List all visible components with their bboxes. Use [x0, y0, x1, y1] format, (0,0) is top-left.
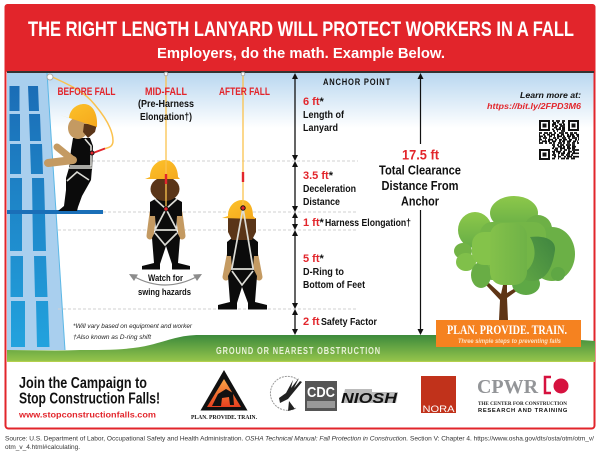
dimension labels: ANCHOR POINT — [323, 77, 391, 88]
swing hazards note: swing hazards — [138, 287, 191, 298]
total clearance label: Distance From — [382, 178, 458, 193]
head — [68, 117, 88, 139]
footnotes: *Will vary based on equipment and worker — [73, 324, 193, 330]
panel: sky gradient — [7, 73, 594, 128]
learn more link — [487, 91, 582, 111]
torso — [69, 138, 93, 170]
QR code — [539, 120, 579, 160]
harness — [155, 199, 177, 245]
dimension arrows — [292, 73, 298, 335]
d-ring — [90, 151, 94, 155]
ground label: GROUND OR NEAREST OBSTRUCTION — [216, 346, 381, 357]
arms — [226, 256, 259, 277]
dimension labels: Safety Factor — [321, 316, 377, 328]
total clearance label: 17.5 ft — [402, 148, 439, 162]
footnotes: †Also known as D-ring shift — [73, 335, 151, 341]
hair — [228, 218, 256, 240]
logo: plan provide train: PLAN. PROVIDE. TRAIN. — [191, 414, 257, 421]
harness — [231, 208, 254, 285]
source note: Source: U.S. Department of Labor, Occupational Safety and Health Administration. OSHA Technical Manual: Fall Protection in Construction. Section V: Chapter 4. https://www.osha.gov/dts/osta/otm/otm_v/ — [5, 436, 594, 442]
source note — [5, 436, 594, 451]
dimension labels: 3.5 ft* — [303, 170, 334, 182]
legs and torso — [218, 238, 267, 310]
orange slogan box: PLAN. PROVIDE. TRAIN. — [447, 323, 567, 337]
logo: CPWR: THE CENTER FOR CONSTRUCTION — [478, 402, 568, 407]
logo: CDC — [305, 381, 337, 411]
figure: after fall — [218, 72, 267, 310]
orange slogan box: Three simple steps to preventing falls — [458, 339, 562, 345]
campaign call to action: Join the Campaign to — [19, 375, 147, 392]
stage labels: MID-FALL — [145, 86, 187, 98]
total clearance label — [379, 148, 461, 208]
legs and torso — [142, 198, 190, 270]
campaign call to action: www.stopconstructionfalls.com — [18, 410, 156, 420]
stage labels: BEFORE FALL — [58, 86, 116, 98]
campaign call to action — [18, 375, 160, 420]
rope — [165, 74, 167, 209]
platform — [7, 210, 103, 214]
dimension labels: 2 ft — [303, 316, 320, 328]
helmet — [60, 104, 97, 127]
canopy — [454, 196, 575, 295]
logo: NORA: NORA — [422, 404, 454, 414]
dimension labels: Lanyard — [303, 122, 338, 134]
arms — [150, 213, 182, 236]
swing hazards note — [129, 273, 202, 298]
learn more link: https://bit.ly/2FPD3M6 — [487, 102, 582, 111]
swing hazards note: Watch for — [148, 273, 183, 284]
helmet — [145, 160, 180, 179]
total clearance label: Total Clearance — [379, 162, 461, 178]
figure: mid-fall — [142, 72, 190, 270]
panel: header banner — [4, 4, 596, 73]
arms — [48, 147, 73, 163]
logo: CPWR: RESEARCH AND TRAINING — [478, 408, 568, 414]
dimension labels: Distance — [303, 196, 340, 208]
dimension labels: 5 ft* — [303, 253, 324, 265]
source note: otm_v_4.html#calculating. — [5, 444, 80, 451]
logo: CPWR: CPWR — [477, 376, 539, 398]
lanyard — [50, 76, 113, 149]
building — [7, 73, 65, 350]
stage labels: Elongation†) — [140, 111, 192, 123]
hair — [150, 177, 180, 201]
ground — [7, 335, 595, 362]
stage labels: (Pre-Harness — [138, 98, 194, 110]
helmet — [222, 200, 256, 219]
total clearance label: Anchor — [401, 194, 439, 208]
logo: plan provide train — [191, 370, 257, 421]
stage labels — [58, 86, 270, 123]
stage labels: AFTER FALL — [219, 86, 270, 98]
logo: NIOSH: NIOSH — [341, 390, 398, 407]
subtitle: Employers, do the math. Example Below. — [157, 46, 445, 62]
rope — [242, 74, 244, 208]
campaign call to action: Stop Construction Falls! — [19, 390, 160, 408]
dimension labels — [303, 77, 411, 328]
legs — [58, 168, 92, 211]
dimension labels: 1 ft* — [303, 217, 324, 229]
logo: HHS — [270, 376, 302, 411]
logo: CDC: CDC — [307, 384, 335, 401]
trunk — [486, 283, 518, 320]
logo: CPWR — [477, 376, 568, 414]
dimension labels: Length of — [303, 109, 344, 121]
total clearance arrow — [418, 73, 424, 335]
dashed level lines — [58, 161, 358, 309]
logo: NORA — [421, 376, 456, 414]
dimension labels: D-Ring to — [303, 266, 344, 278]
tree — [454, 196, 575, 320]
dimension labels: Deceleration — [303, 183, 356, 195]
learn more link: Learn more at: — [520, 91, 581, 100]
figure: before fall — [47, 74, 113, 211]
orange slogan box — [436, 320, 581, 347]
dimension labels: Harness Elongation† — [325, 217, 411, 229]
dimension labels: 6 ft* — [303, 96, 324, 108]
dimension labels: Bottom of Feet — [303, 279, 365, 291]
footnotes — [73, 324, 193, 341]
